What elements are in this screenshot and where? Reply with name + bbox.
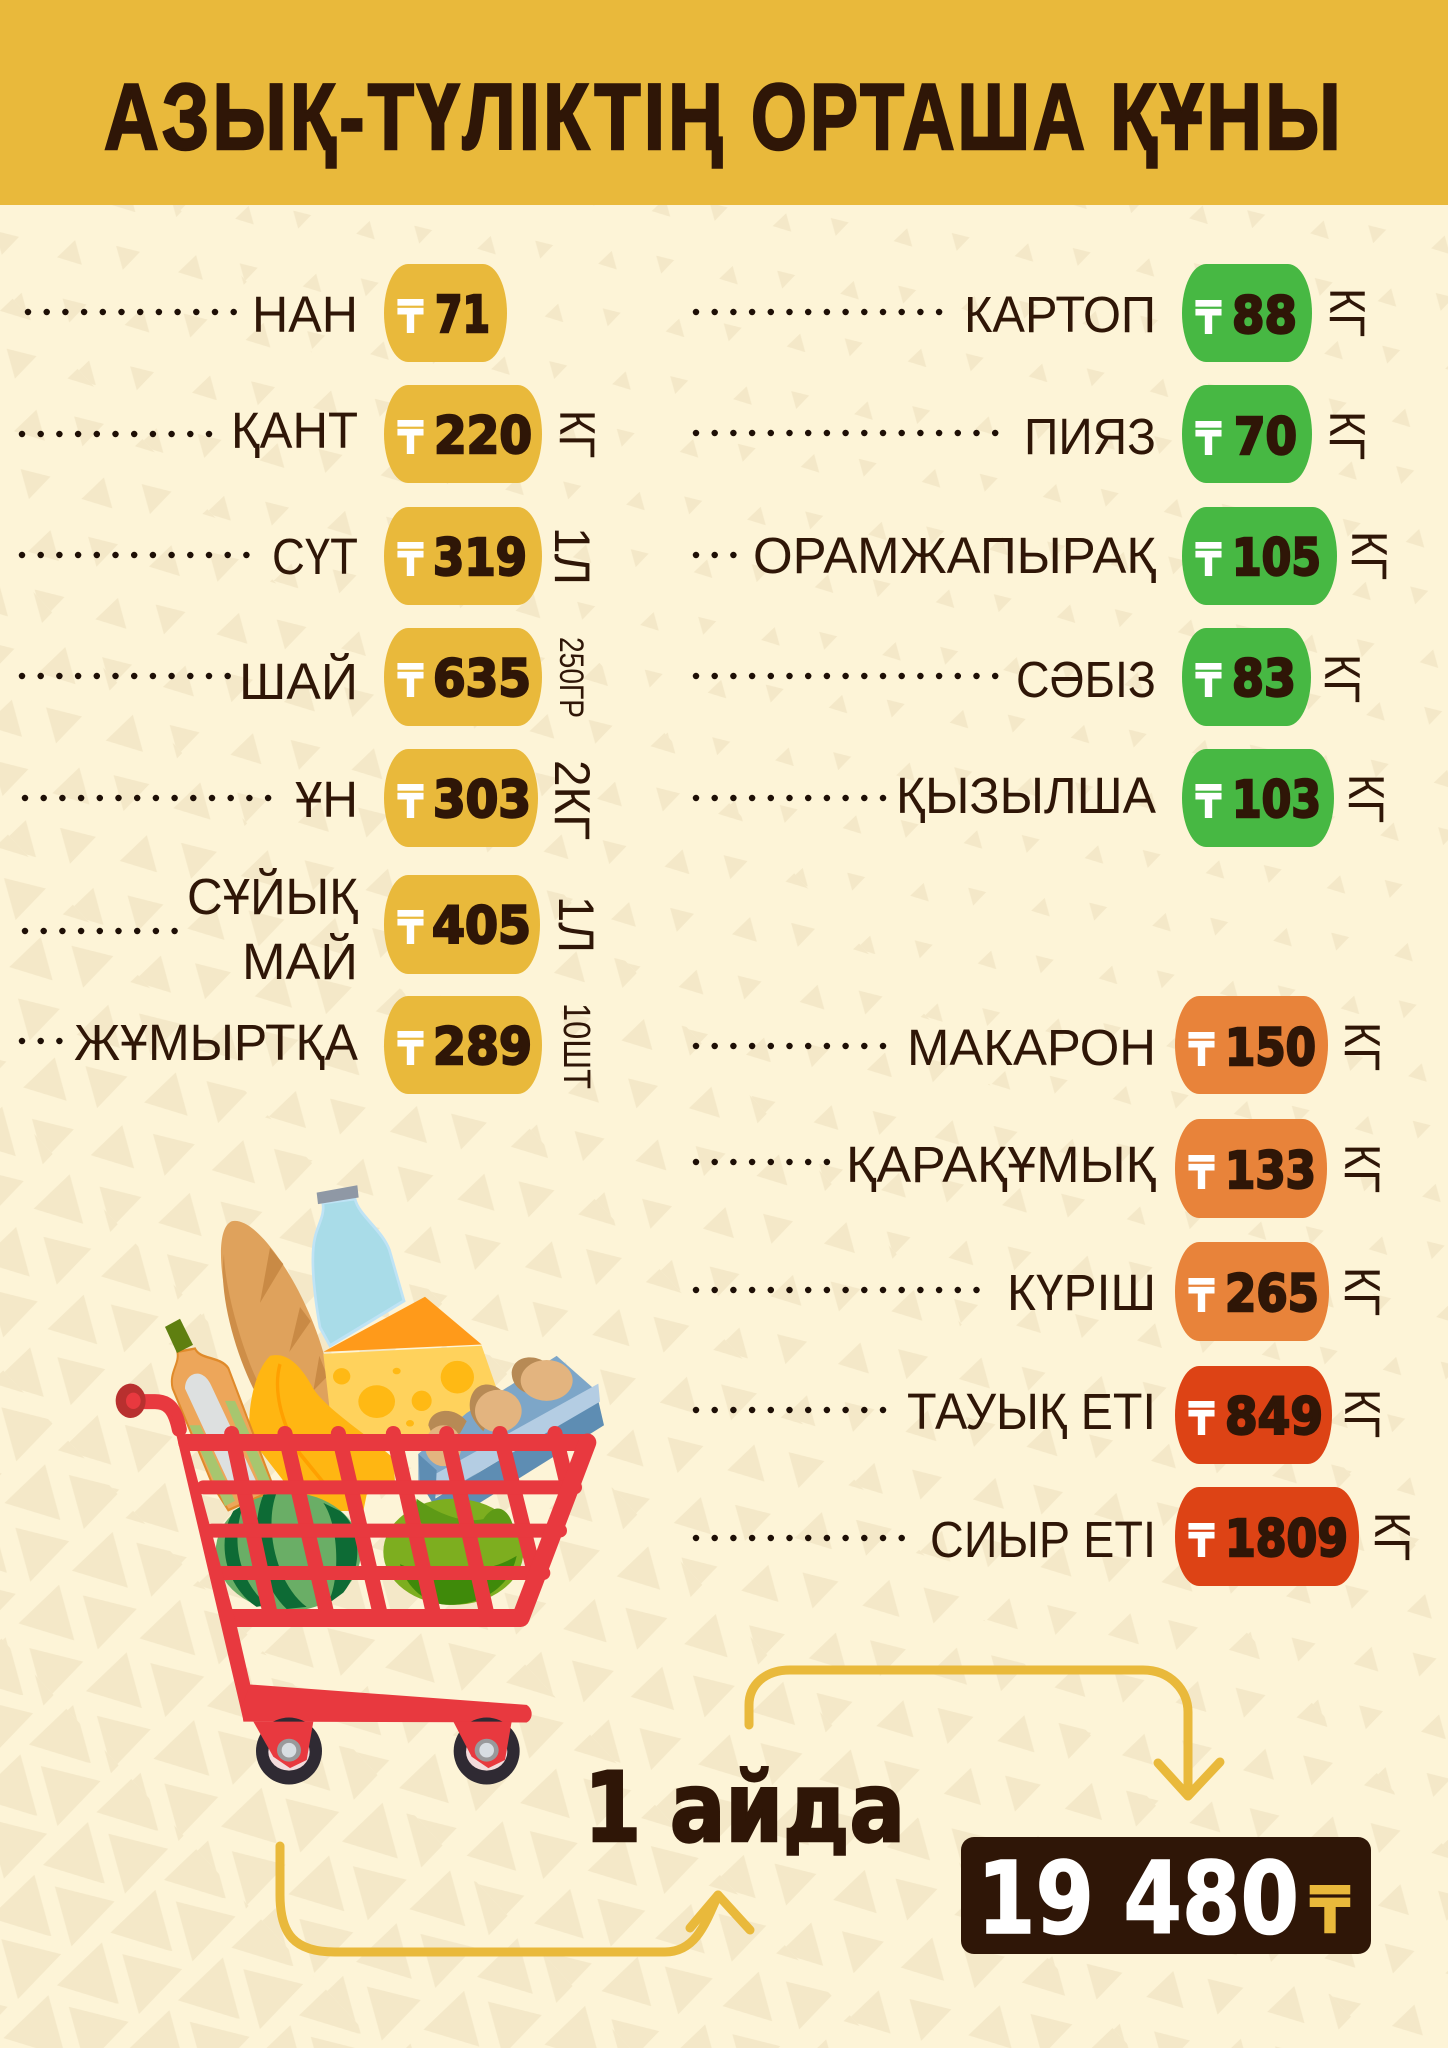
row: bread: ₸	[397, 290, 424, 344]
panel: grain and meat prices	[696, 996, 1420, 1586]
panel: basic goods prices	[22, 264, 605, 1094]
row: flour: ₸	[397, 775, 424, 829]
row: beef: КГ	[1364, 1512, 1420, 1561]
row: onion	[696, 385, 1375, 483]
icon: shopping cart with groceries	[116, 1185, 604, 1784]
row: potato: 88	[1232, 287, 1297, 346]
icon: bread	[221, 1221, 335, 1421]
row: bread	[28, 264, 507, 362]
title banner	[0, 0, 1448, 205]
row: oil: МАЙ	[242, 932, 358, 990]
row: chicken: 849	[1225, 1388, 1323, 1447]
title: ҚҰНЫ	[1110, 64, 1344, 169]
icon: cart frame and handle	[116, 1384, 532, 1722]
arrow: month label to total	[749, 1670, 1220, 1796]
row: potato	[696, 264, 1375, 362]
row: flour: ҰН	[295, 771, 358, 828]
icon: cart basket	[187, 1433, 587, 1618]
row: eggs: 289	[433, 1018, 532, 1077]
row: chicken	[696, 1366, 1390, 1464]
row: potato: КАРТОП	[964, 286, 1156, 343]
row: beet: ₸	[1195, 775, 1222, 829]
row: oil: СҰЙЫҚ	[187, 867, 358, 925]
row: pasta: КГ	[1334, 1022, 1390, 1071]
row: beef	[696, 1487, 1420, 1586]
row: cabbage	[696, 507, 1397, 605]
row: cabbage: ₸	[1195, 533, 1222, 587]
panel: vegetable prices	[696, 264, 1397, 847]
row: pasta: ₸	[1188, 1023, 1215, 1077]
row: onion: КГ	[1319, 411, 1375, 460]
row: pasta	[696, 996, 1390, 1094]
icon: cart wheels	[253, 1718, 520, 1784]
row: rice: КҮРІШ	[1007, 1264, 1156, 1321]
row: buckwheat: 133	[1225, 1142, 1316, 1201]
icon: oil bottle	[165, 1319, 272, 1510]
arrow: cart to month label	[280, 1846, 750, 1952]
icon: bananas	[249, 1355, 395, 1511]
row: buckwheat: КГ	[1334, 1144, 1390, 1193]
row: beet: 103	[1232, 771, 1321, 830]
row: sugar: ҚАНТ	[231, 402, 358, 459]
row: onion: ₸	[1195, 412, 1222, 466]
row: tea: ШАЙ	[239, 652, 358, 710]
row: milk: 319	[433, 529, 527, 588]
row: flour: 2КГ	[544, 760, 600, 840]
row: potato: КГ	[1319, 288, 1375, 337]
row: rice: 265	[1225, 1265, 1319, 1324]
row: eggs	[22, 996, 597, 1094]
row: carrot	[696, 628, 1370, 726]
row: cabbage: ОРАМЖАПЫРАҚ	[753, 527, 1156, 584]
row: chicken: ₸	[1188, 1392, 1215, 1446]
row: rice	[696, 1242, 1390, 1341]
text: per month: 1 айда	[584, 1752, 905, 1864]
row: tea: 635	[433, 650, 531, 709]
row: pasta: 150	[1225, 1019, 1316, 1078]
row: oil: 1Л	[548, 896, 604, 953]
title: АЗЫҚ-ТҮЛІКТІҢ	[104, 64, 726, 169]
row: sugar: 220	[434, 407, 532, 466]
row: potato: ₸	[1195, 291, 1222, 345]
row: carrot: КГ	[1314, 654, 1370, 703]
row: onion: 70	[1234, 408, 1297, 467]
row: rice: КГ	[1334, 1267, 1390, 1316]
row: sugar	[22, 385, 605, 483]
row: cabbage: КГ	[1341, 531, 1397, 580]
row: eggs: ЖҰМЫРТҚА	[74, 1014, 358, 1071]
icon: egg carton	[418, 1356, 604, 1511]
row: oil: 405	[432, 897, 531, 956]
icon: cheese	[323, 1297, 502, 1442]
callout: monthly total: ₸	[1309, 1872, 1351, 1949]
row: tea: ₸	[397, 654, 424, 708]
row: milk: СҮТ	[272, 528, 358, 585]
row: chicken: КГ	[1334, 1389, 1390, 1438]
title: ОРТАША	[751, 64, 1088, 169]
row: milk: ₸	[397, 533, 424, 587]
row: carrot: 83	[1232, 650, 1296, 709]
row: rice: ₸	[1188, 1269, 1215, 1323]
row: chicken: ТАУЫҚ ЕТІ	[907, 1383, 1156, 1440]
row: beet: КГ	[1338, 774, 1394, 823]
row: milk: 1Л	[544, 527, 600, 585]
icon: watermelon	[216, 1493, 361, 1611]
row: buckwheat	[696, 1119, 1390, 1218]
row: beef: 1809	[1225, 1510, 1348, 1569]
row: eggs: 10ШТ	[555, 1003, 597, 1089]
row: onion: ПИЯЗ	[1024, 408, 1156, 465]
row: beet	[696, 749, 1394, 847]
row: carrot: ₸	[1195, 654, 1222, 708]
row: beef: СИЫР ЕТІ	[930, 1511, 1156, 1568]
row: milk	[22, 507, 600, 605]
row: flour: 303	[433, 771, 531, 830]
row: cabbage: 105	[1232, 529, 1321, 588]
row: buckwheat: ҚАРАҚҰМЫҚ	[846, 1136, 1156, 1193]
row: beet: ҚЫЗЫЛША	[896, 767, 1156, 824]
row: beef: ₸	[1188, 1514, 1215, 1568]
icon: cabbage	[383, 1499, 523, 1605]
row: tea	[22, 628, 590, 726]
row: eggs: ₸	[397, 1022, 424, 1076]
row: oil: ₸	[397, 901, 424, 955]
row: pasta: МАКАРОН	[907, 1019, 1156, 1076]
row: flour	[25, 749, 600, 847]
row: bread: 71	[435, 286, 490, 345]
row: buckwheat: ₸	[1188, 1146, 1215, 1200]
title	[104, 64, 1344, 169]
row: bread: НАН	[252, 286, 358, 343]
row: sugar: ₸	[397, 411, 424, 465]
icon: milk bottle	[313, 1185, 404, 1346]
row: tea: 250ГР	[552, 637, 590, 718]
row: sugar: КГ	[549, 410, 605, 458]
row: carrot: СӘБІЗ	[1016, 651, 1156, 708]
callout: monthly total: 19 480	[977, 1840, 1299, 1957]
row: oil	[25, 867, 604, 990]
